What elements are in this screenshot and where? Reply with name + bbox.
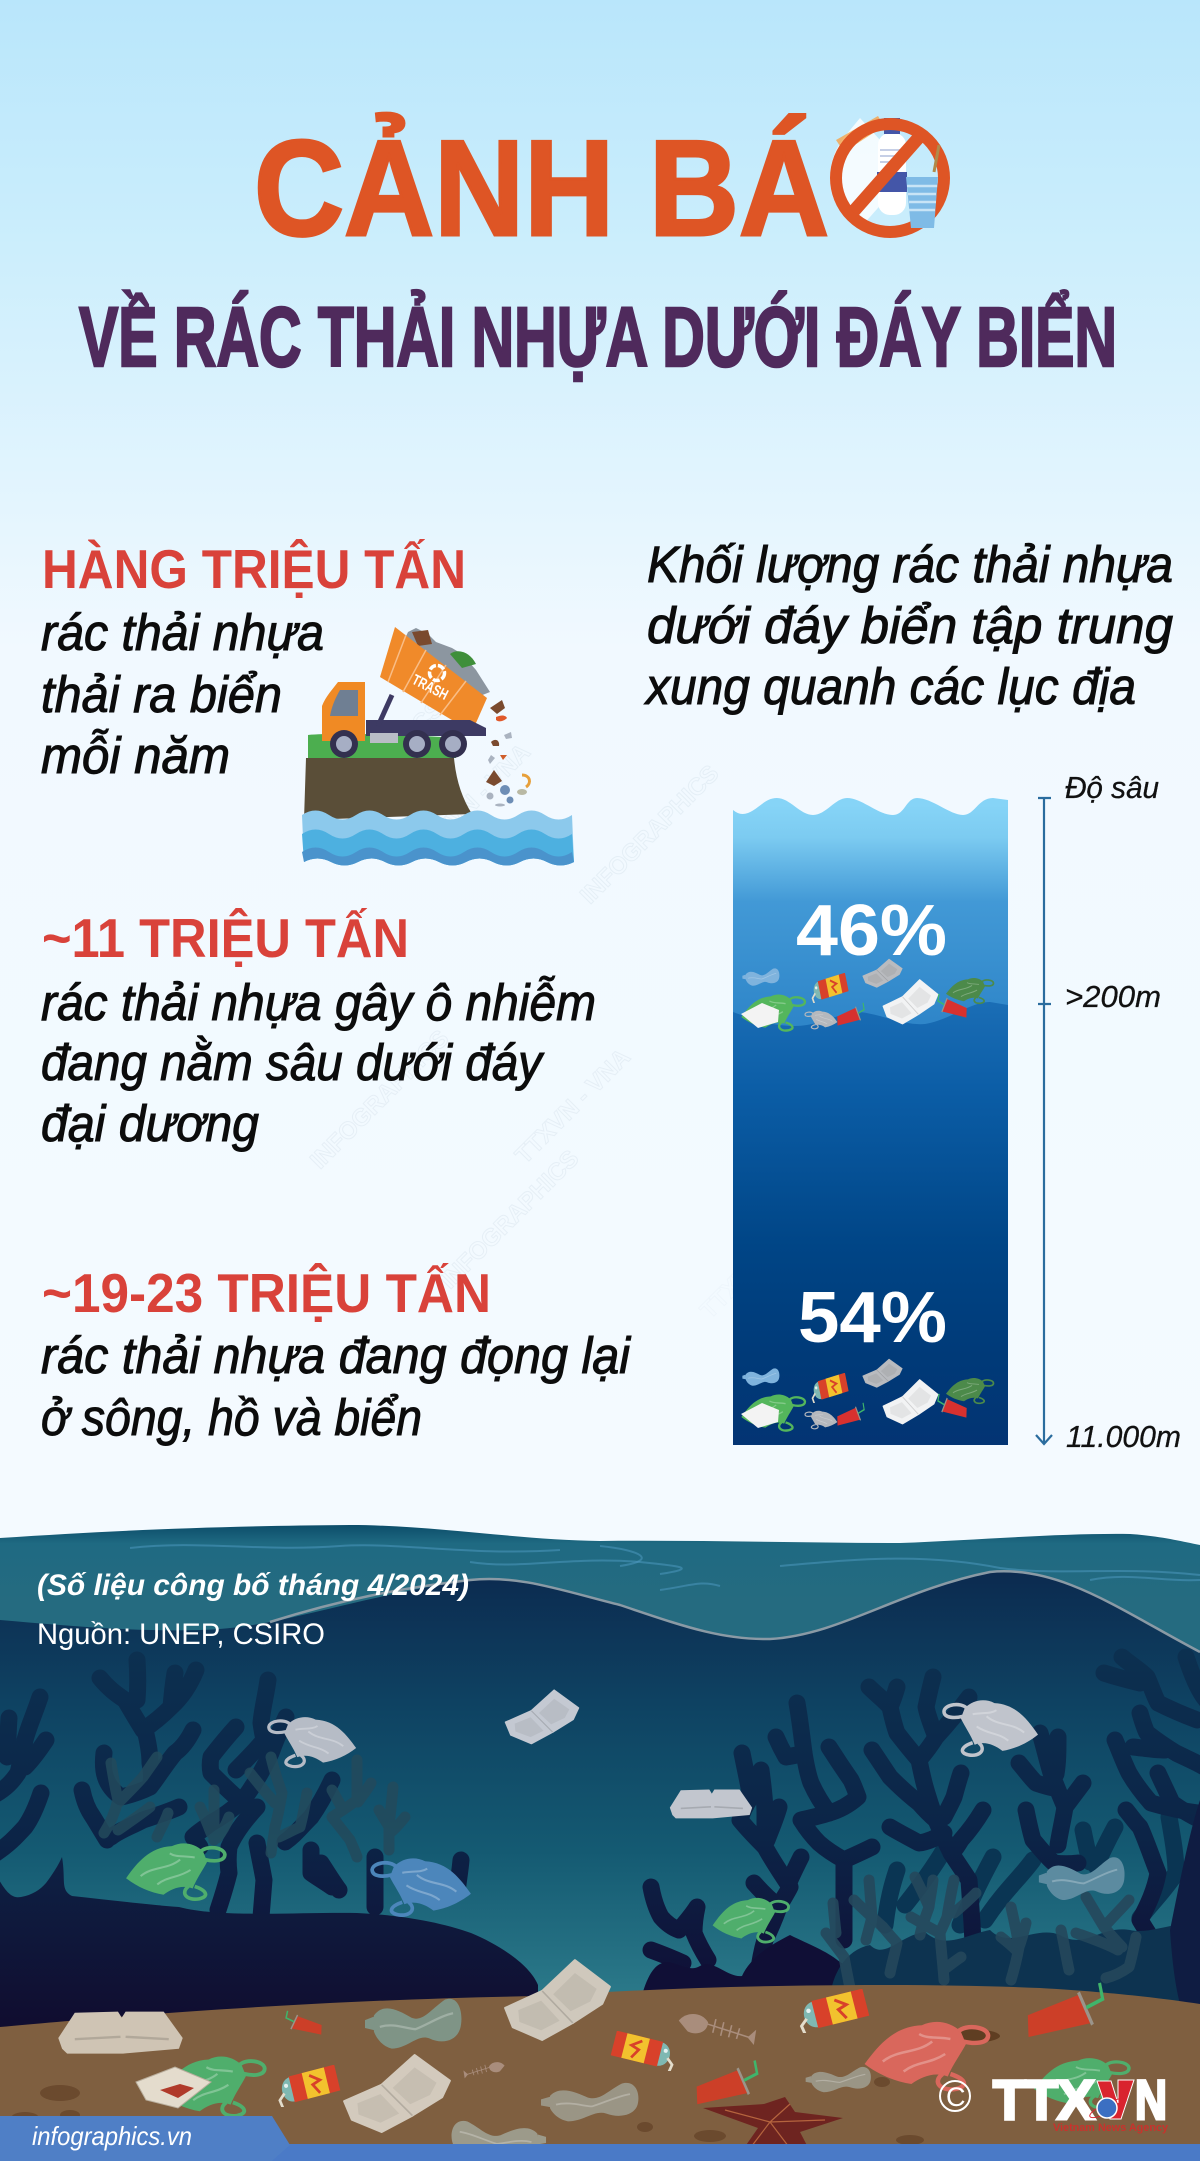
depth axis — [1036, 770, 1181, 1454]
text block: hàng triệu tấn: HÀNG TRIỆU TẤN — [42, 538, 466, 600]
floating: green bag — [126, 1843, 225, 1899]
text block: hàng triệu tấn — [41, 538, 466, 784]
floating: green bag right — [713, 1898, 789, 1942]
floating: foam closed — [670, 1789, 752, 1818]
text block: ~11 triệu tấn: ~11 TRIỆU TẤN — [42, 907, 409, 969]
cliff — [304, 758, 472, 820]
trash set upper — [741, 959, 994, 1031]
TTXVN logo: Vietnam News Agency — [1053, 2122, 1169, 2134]
seabed: green bag — [160, 2057, 265, 2116]
seabed: bottle 3 — [806, 2067, 871, 2092]
seabed: fish bones — [463, 2062, 505, 2078]
falling trash — [486, 700, 529, 806]
TTXVN logo: T — [993, 2068, 1026, 2131]
text block: ~11 triệu tấn: đang nằm sâu dưới đáy — [41, 1034, 545, 1091]
seabed: bottle — [365, 1999, 461, 2049]
seabed: bottle right — [541, 2083, 638, 2121]
text block: ~19-23 triệu tấn — [41, 1262, 632, 1446]
ocean scene — [0, 1525, 1200, 2161]
seabed: fish bones 2 — [679, 2014, 756, 2045]
text block: right heading: xung quanh các lục địa — [643, 658, 1136, 715]
seabed: foam closed — [58, 2012, 183, 2054]
arrow head — [1036, 1435, 1052, 1444]
seabed spots — [11, 2029, 1000, 2145]
text block: ~11 triệu tấn: đại dương — [41, 1095, 259, 1152]
right side dark mass — [1170, 1800, 1200, 2004]
dump bed — [380, 627, 487, 732]
seabed: red cup — [697, 2061, 757, 2104]
source: Nguồn: UNEP, CSIRO — [37, 1618, 325, 1651]
text block: hàng triệu tấn: mỗi năm — [41, 727, 230, 784]
ground — [308, 734, 456, 758]
watermarks: TTXVN - VNA — [695, 1199, 821, 1324]
text block: hàng triệu tấn: thải ra biển — [41, 666, 282, 723]
watermarks: INFOGRAPHICS — [435, 1145, 584, 1294]
upper water — [733, 798, 1008, 1100]
TTXVN logo — [940, 2068, 1169, 2134]
seabed: food tray — [136, 2067, 211, 2108]
site name: infographics.vn — [32, 2121, 192, 2151]
middle corals right — [885, 1817, 1176, 1925]
watermarks: INFOGRAPHICS — [300, 695, 449, 844]
watermarks: INFOGRAPHICS — [305, 1025, 454, 1174]
chart: ocean depth column — [733, 798, 1008, 1445]
front corals right — [651, 1657, 1200, 1985]
deep water — [0, 1571, 1200, 2040]
dark reef base right — [642, 1935, 900, 1998]
text block: ~11 triệu tấn — [41, 907, 596, 1152]
seabed: red bag — [865, 2022, 988, 2089]
TTXVN logo: N — [1135, 2068, 1167, 2131]
surface highlights — [130, 1545, 1200, 1590]
54 percent label: 54% — [798, 1278, 947, 1358]
text block: ~19-23 triệu tấn: ~19-23 TRIỆU TẤN — [42, 1262, 491, 1324]
lower water — [733, 1002, 1008, 1445]
floating: translucent bottle — [1039, 1857, 1125, 1900]
icon: no-plastic sign — [830, 116, 944, 232]
surface water — [0, 1525, 1200, 1700]
truck cab and chassis — [322, 682, 486, 743]
text block: hàng triệu tấn: rác thải nhựa — [41, 604, 324, 661]
text block: ~11 triệu tấn: rác thải nhựa gây ô nhiễm — [41, 974, 596, 1031]
sea waves — [302, 810, 574, 866]
starfish — [703, 2097, 843, 2161]
watermarks: TTXVN - VNA — [510, 1044, 636, 1169]
mid reef base right — [830, 1924, 1200, 2012]
bottom band — [0, 2144, 1200, 2161]
TTXVN logo: T — [1025, 2068, 1058, 2131]
floating: foam box — [506, 1690, 578, 1744]
watermarks: INFOGRAPHICS — [815, 1250, 964, 1399]
trash set lower — [741, 1359, 994, 1431]
seabed — [0, 1985, 1200, 2161]
seabed: big foam box — [505, 1960, 610, 2040]
seabed: big red cup — [1028, 1983, 1103, 2037]
wheels — [330, 730, 467, 758]
text block: ~19-23 triệu tấn: rác thải nhựa đang đọng lại — [41, 1327, 632, 1384]
seabed: clear bottle — [452, 2121, 546, 2158]
46 percent label: 46% — [796, 891, 947, 971]
label: 200m: >200m — [1065, 979, 1161, 1014]
floating: gray bag — [269, 1717, 356, 1767]
text block: right heading — [643, 536, 1173, 715]
title: CẢNH BÁO: CẢNH BÁ — [254, 112, 829, 264]
seabed: tumbler 2 — [796, 1989, 870, 2035]
copyright mark — [940, 2081, 970, 2112]
floating: gray bag right — [944, 1700, 1038, 1755]
site tab — [0, 2116, 290, 2161]
label: 11000m: 11.000m — [1066, 1419, 1181, 1454]
label: Độ sâu: Độ sâu — [1065, 770, 1159, 805]
seabed: tumbler — [275, 2065, 341, 2109]
watermarks — [300, 695, 964, 1399]
front corals left — [0, 1660, 461, 1917]
TTXVN logo: X — [1057, 2068, 1095, 2131]
back corals left — [104, 1757, 405, 1857]
text block: ~19-23 triệu tấn: ở sông, hồ và biển — [41, 1389, 422, 1446]
text block: right heading: dưới đáy biển tập trung — [647, 597, 1173, 654]
watermarks: INFOGRAPHICS — [770, 940, 919, 1089]
dump bed: TRASH — [409, 671, 451, 704]
watermarks: INFOGRAPHICS — [575, 760, 724, 909]
seabed: foam box — [344, 2055, 450, 2132]
mound left — [0, 1857, 538, 2040]
text block: right heading: Khối lượng rác thải nhựa — [647, 536, 1173, 593]
watermarks: TTXVN — [775, 810, 850, 884]
note: data date: (Số liệu công bố tháng 4/2024) — [37, 1569, 469, 1602]
illustration: dump truck on cliff — [302, 627, 574, 866]
wave line — [270, 1571, 1200, 1652]
seabed: green bag right — [1034, 2058, 1129, 2108]
back corals right — [826, 1877, 1136, 1988]
seabed: small cup — [286, 2011, 322, 2035]
copyright mark: C — [946, 2082, 966, 2112]
floating: blue bag — [372, 1858, 471, 1915]
trash pile — [400, 628, 490, 700]
watermarks: TTXVN - VNA — [410, 739, 536, 864]
seabed: tumbler 3 — [610, 2031, 677, 2072]
